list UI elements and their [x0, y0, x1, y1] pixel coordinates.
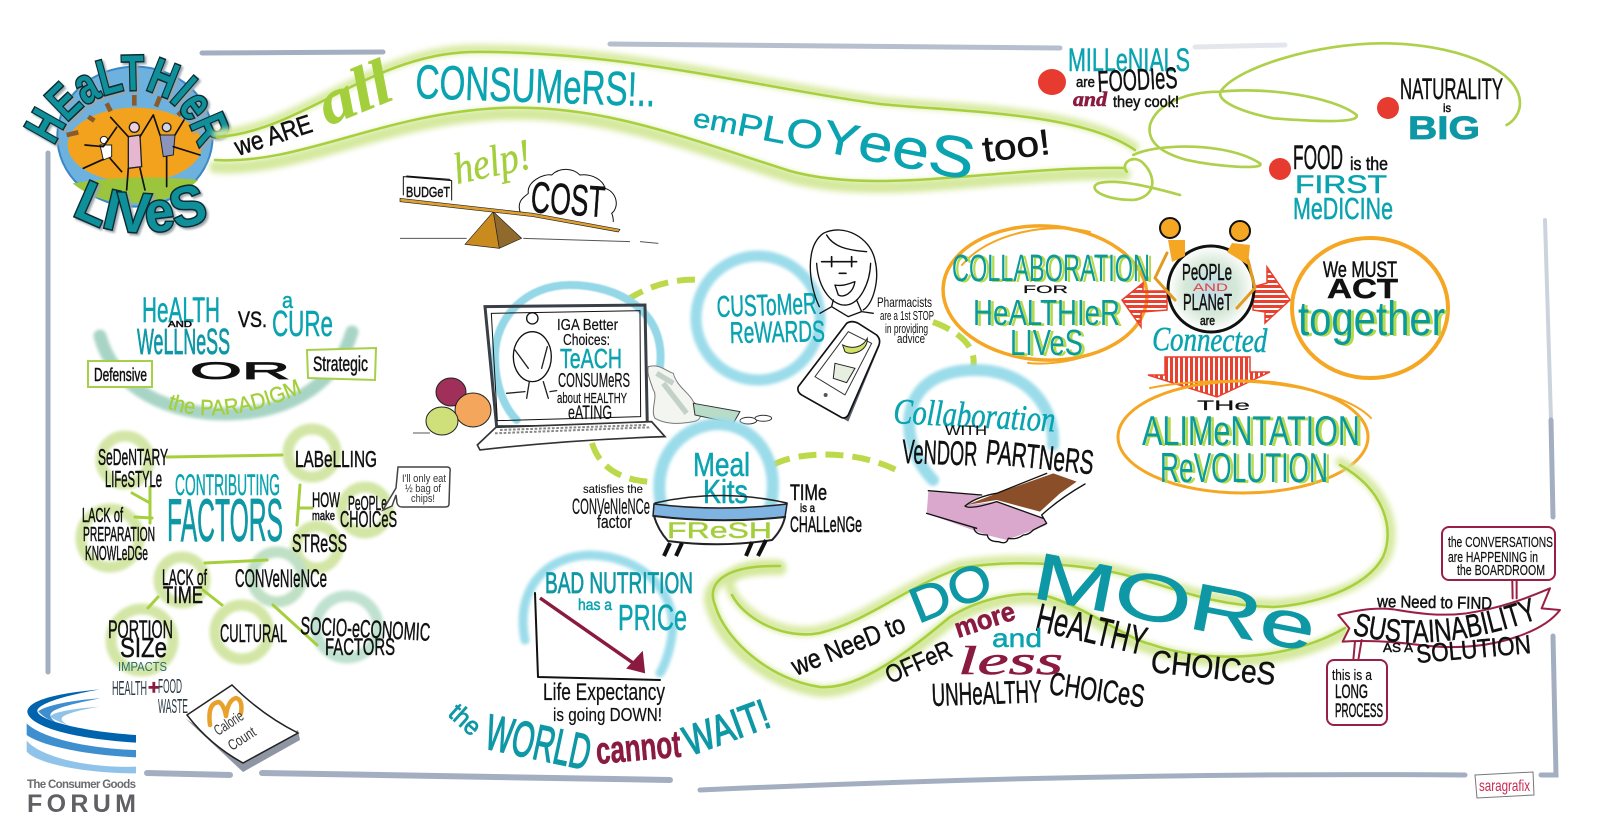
contributing factors mind map: CONTRIBUTING: [175, 469, 280, 502]
icon: handshake: [927, 473, 1085, 543]
banner: all: all: [307, 45, 402, 139]
people and planet globe: [1152, 218, 1268, 360]
factor labels: SIZe: [120, 632, 167, 663]
convenience note: CONVeNIeNCe: [572, 494, 650, 519]
icon: phone: [798, 322, 880, 422]
millenials note: FOODIeS: [1097, 62, 1178, 99]
icon: vegetables: [648, 366, 772, 424]
callout: long process: [1327, 660, 1387, 725]
nutrition heading: BAD NUTRITION: [545, 567, 693, 600]
collaboration with vendor partners: VeNDOR: [902, 433, 978, 474]
factor labels: HOW: [312, 489, 340, 512]
globe text: are: [1200, 313, 1215, 328]
rewards ring: [696, 256, 820, 380]
offer: OFFeR: [881, 635, 956, 689]
arrow: down red: [1148, 357, 1270, 397]
scale: budget vs cost: [400, 130, 658, 248]
factor labels: CONVeNIeNCe: [235, 565, 327, 593]
convenience note: [572, 482, 650, 532]
life expectancy caption: [543, 679, 665, 725]
millenials note: and: [1073, 87, 1108, 111]
less: less: [958, 638, 1063, 683]
paradigm: health and wellness vs a cure: AND: [168, 320, 192, 329]
laptop drawing: [477, 285, 665, 450]
act together text: together: [1298, 293, 1445, 346]
food first medicine note: FOOD: [1293, 139, 1343, 177]
the world cannot wait: WORLD: [481, 704, 596, 781]
paradigm label: the PARADIGM: [168, 379, 302, 416]
banner: trailing loops: [1095, 43, 1520, 200]
speech bubble: half bag of chips: chips!: [411, 493, 435, 505]
note: calorie count text: Calorie: [211, 708, 247, 739]
paradigm: or: OR: [190, 358, 290, 385]
factor rings: [81, 429, 388, 671]
paradigm: health and wellness vs a cure: [87, 288, 378, 422]
food first medicine note: is the: [1350, 154, 1388, 174]
nutrition heading: [545, 567, 693, 638]
banner: consumers: CONSUMeRS!..: [415, 56, 656, 117]
millenials heading: MILLeNIALS: [1068, 42, 1190, 78]
we need to: we NeeD to: [786, 609, 910, 682]
as a solution: AS A: [1383, 640, 1413, 655]
logo: The Consumer Goods Forum: [27, 689, 136, 818]
icon: fresh bowl: [653, 496, 787, 556]
food first medicine note: [1269, 139, 1393, 226]
speech bubble: half bag of chips: I'll only eat: [402, 473, 446, 485]
banner: employees: emPLOYeeS: [690, 75, 981, 193]
convenience note: satisfies the: [583, 482, 643, 496]
banner: we are: we ARE: [230, 108, 316, 162]
orange ring: [1292, 238, 1448, 378]
speech bubble: half bag of chips: [383, 467, 450, 510]
signature: saragrafix: saragrafix: [1479, 778, 1530, 795]
factor labels: PREPARATION: [83, 524, 155, 546]
factor labels: LACK of: [162, 565, 207, 590]
food first medicine note: MeDICINe: [1293, 191, 1393, 226]
pharmacists note: are a 1st STOP: [880, 308, 934, 323]
healthy choices: CHOICeS: [1149, 643, 1277, 692]
as a solution: SOLUTION: [1415, 629, 1532, 669]
pharmacists note: in providing: [885, 321, 928, 336]
factor labels: HEALTH: [112, 678, 147, 700]
contributing factors mind map: [81, 429, 450, 718]
factor labels: CHOICeS: [340, 506, 397, 532]
globe circle: [1168, 246, 1254, 332]
globe text: AND: [1193, 282, 1228, 294]
factor labels: [82, 444, 431, 718]
paradigm swoosh: [100, 332, 352, 414]
convenience note: factor: [597, 512, 632, 532]
laptop text: CONSUMeRS: [558, 370, 630, 392]
laptop text: [557, 317, 630, 424]
callout: conversations in the boardroom: are HAPPENING in: [1448, 549, 1538, 566]
unhealthy choices: CHOICeS: [1047, 665, 1147, 714]
as a solution: [1383, 629, 1532, 669]
note: calorie count text: Count: [225, 723, 260, 754]
factor labels: TIME: [163, 582, 203, 609]
collaboration text: HeALTHIeR: [973, 292, 1120, 333]
naturality note: [1377, 73, 1503, 146]
logo: Healthier word: HEaLTHIeR: [22, 54, 232, 152]
we need to find: we Need to FIND: [1376, 592, 1492, 613]
speech bubble: half bag of chips: ½ bag of: [405, 483, 442, 495]
healthy choices: [1032, 596, 1277, 692]
sustainability word: SUSTAINABILITY: [1354, 598, 1532, 643]
naturality note: is: [1443, 101, 1451, 115]
factor labels: LABeLLING: [295, 446, 377, 472]
forum arcs: [27, 689, 136, 773]
rewards text: ReWARDS: [730, 315, 825, 350]
factor labels: STReSS: [292, 530, 347, 558]
orange rings: [940, 221, 1150, 365]
the world cannot wait: the: [443, 697, 488, 742]
ribbon outline and stems: [1338, 580, 1560, 660]
laptop text: TeACH: [560, 343, 622, 374]
vendor heading: Collaboration: [893, 391, 1056, 439]
collaboration text: COLLABORATION: [952, 248, 1150, 290]
laptop text: about HEALTHY: [557, 390, 627, 407]
collaboration text: FOR: [1023, 284, 1068, 296]
globe text: PeOPLe: [1182, 259, 1232, 285]
factor labels: CULTURAL: [220, 620, 287, 648]
factor connectors: [132, 455, 317, 645]
meal kits ring: [659, 424, 773, 508]
factor labels: LACK of: [82, 505, 123, 527]
naturality note: NATURALITY: [1400, 73, 1503, 106]
scale: cost: COST: [529, 173, 607, 227]
scale: help: help!: [449, 130, 535, 194]
nutrition heading: PRICe: [618, 597, 687, 638]
factor labels: KNOWLeDGe: [85, 543, 148, 565]
ellipse: the alimentation revolution: [1118, 381, 1371, 493]
the world cannot wait: [443, 690, 776, 781]
connected: Connected: [1152, 321, 1268, 360]
factor labels: PORTION: [108, 616, 173, 644]
calorie count note: [185, 685, 300, 772]
do: DO: [901, 551, 1000, 634]
bullet: red dot: [1269, 158, 1291, 180]
unhealthy choices: UNHeALTHY: [931, 673, 1042, 713]
globe text: PLANeT: [1183, 289, 1232, 315]
time challenge note: CHALLeNGe: [790, 512, 862, 537]
nutrition ring: [523, 555, 673, 673]
alimentation text: THe: [1197, 397, 1250, 413]
paradigm: health and wellness vs a cure: VS.: [238, 307, 267, 332]
factor labels: IMPACTS: [118, 659, 167, 674]
time challenge note: TIMe: [790, 480, 827, 505]
factor labels: +: [148, 677, 160, 699]
life expectancy caption: Life Expectancy: [543, 679, 665, 706]
icon: left person: [1155, 218, 1185, 300]
act together text: We MUST: [1323, 257, 1397, 282]
meal kits text: [693, 446, 750, 510]
callout: conversations in the boardroom: the CONVERSATIONS: [1448, 534, 1553, 551]
globe text: [1182, 259, 1232, 328]
icon: pharmacist woman: [810, 230, 877, 317]
the world cannot wait: cannot: [594, 724, 683, 773]
ellipse: we must act together: [1292, 238, 1448, 378]
rewards text: CUSToMeR: [716, 288, 817, 324]
paradigm: defensive box: Defensive: [94, 365, 147, 385]
factor labels: make: [312, 508, 335, 523]
collaboration text: LIVeS: [1010, 322, 1083, 363]
icon: golden arches: [209, 698, 241, 725]
nutrition heading: has a: [578, 597, 612, 614]
callout: long process: this is a: [1332, 667, 1373, 684]
bullet: red dot: [1038, 69, 1066, 95]
paradigm: health and wellness vs a cure: a: [282, 288, 294, 313]
scale drawing: [400, 169, 658, 248]
pharmacists note: advice: [897, 331, 925, 346]
signature: saragrafix: [1475, 772, 1534, 798]
logo: The Consumer Goods Forum: FORUM: [27, 790, 136, 818]
callout: long process: LONG: [1335, 682, 1368, 703]
logo: Healthier Lives badge: [22, 54, 232, 237]
factor labels: PeOPLe: [348, 493, 387, 515]
pharmacists note: Pharmacists: [877, 294, 932, 310]
dashed connectors: [592, 280, 974, 482]
arrow: right red: [1253, 267, 1290, 323]
meal kits text: Kits: [703, 473, 748, 510]
time challenge note: [790, 480, 862, 537]
ellipse: collaboration for healthier lives: [940, 221, 1150, 365]
millenials note: they cook!: [1113, 94, 1179, 111]
paradigm: strategic box: [307, 348, 376, 380]
logo: ring and sun: [57, 67, 213, 207]
factor labels: WASTE: [158, 696, 188, 718]
collaboration text: [952, 248, 1150, 363]
laptop text: Choices:: [563, 332, 610, 349]
act together text: ACT: [1327, 273, 1398, 304]
orange rings: [1118, 381, 1371, 493]
life expectancy caption: is going DOWN!: [553, 705, 662, 725]
more: MORe: [1027, 538, 1322, 665]
scale: budget label: BUDGeT: [406, 184, 450, 201]
arrow: left red: [1122, 283, 1167, 327]
vendor ring: [909, 370, 1053, 480]
collaboration with vendor partners: WITH: [945, 422, 987, 438]
factor labels: FOOD: [158, 676, 182, 698]
laptop: IGA Better Choices: [413, 285, 772, 450]
do more ribbon: [710, 462, 1391, 691]
healthy choices: HeALTHY: [1032, 596, 1151, 664]
time challenge note: is a: [800, 501, 815, 515]
callout: conversations in the boardroom: [1442, 527, 1555, 580]
collaboration with vendor partners: [893, 370, 1096, 543]
the world cannot wait: WAIT!: [677, 690, 776, 764]
icon: fruit: [413, 378, 491, 435]
more emphasis: more: [951, 596, 1019, 644]
bullet: red dot: [1377, 97, 1399, 119]
sustainability ribbon: [1326, 526, 1561, 726]
banner: lime ribbon: [215, 49, 1135, 187]
banner: too: too!: [980, 121, 1052, 170]
food first medicine note: FIRST: [1295, 171, 1387, 199]
paradigm: health and wellness vs a cure: WeLLNeSS: [137, 321, 230, 362]
collaboration with vendor partners: PARTNeRS: [984, 433, 1096, 482]
note: page with shadow: [185, 718, 300, 772]
contributing factors mind map: FACTORS: [167, 487, 283, 554]
paradigm: defensive box: [88, 361, 152, 387]
factor labels: SOCIO-eCONOMIC: [300, 612, 431, 647]
paradigm: strategic box: Strategic: [313, 353, 368, 376]
note: sheet: [187, 685, 298, 763]
meal kits text: Meal: [693, 446, 750, 483]
icon: right person: [1227, 221, 1255, 308]
alimentation text: [1142, 397, 1360, 491]
logo: The Consumer Goods Forum: The Consumer Goods: [27, 779, 136, 791]
act together text: [1298, 257, 1445, 346]
banner: we are all consumers, employees too: [215, 43, 1520, 200]
icon: fresh bowl: FReSH: [667, 518, 772, 543]
chart axes and falling arrow: [535, 593, 660, 680]
callout: long process: PROCESS: [1335, 701, 1383, 722]
logo: Lives word: LIVeS: [72, 179, 210, 237]
alimentation text: ReVOLUTION: [1160, 444, 1328, 491]
paradigm: health and wellness vs a cure: CURe: [272, 303, 333, 344]
factor labels: FACTORS: [325, 634, 395, 661]
customer rewards: [696, 230, 934, 422]
laptop text: IGA Better: [557, 317, 619, 334]
millenials note: are: [1076, 74, 1095, 91]
paradigm: health and wellness vs a cure: HeALTH: [142, 291, 220, 330]
naturality note: BIG: [1408, 110, 1480, 146]
and: and: [992, 623, 1042, 653]
factor labels: LIFeSTYLe: [105, 466, 162, 492]
banner: do more: [710, 462, 1391, 714]
alimentation text: ALIMeNTATION: [1142, 407, 1360, 454]
bad nutrition chart: [523, 555, 693, 725]
laptop text: eATING: [568, 403, 612, 424]
note: calorie count text: [211, 708, 260, 754]
millenials note: [1038, 42, 1190, 111]
rewards text: [716, 288, 825, 350]
callout: conversations in the boardroom: the BOARDROOM: [1457, 562, 1545, 579]
factor labels: SeDeNTARY: [98, 444, 168, 470]
meal kits: [572, 424, 862, 556]
pharmacists note: [877, 294, 934, 346]
